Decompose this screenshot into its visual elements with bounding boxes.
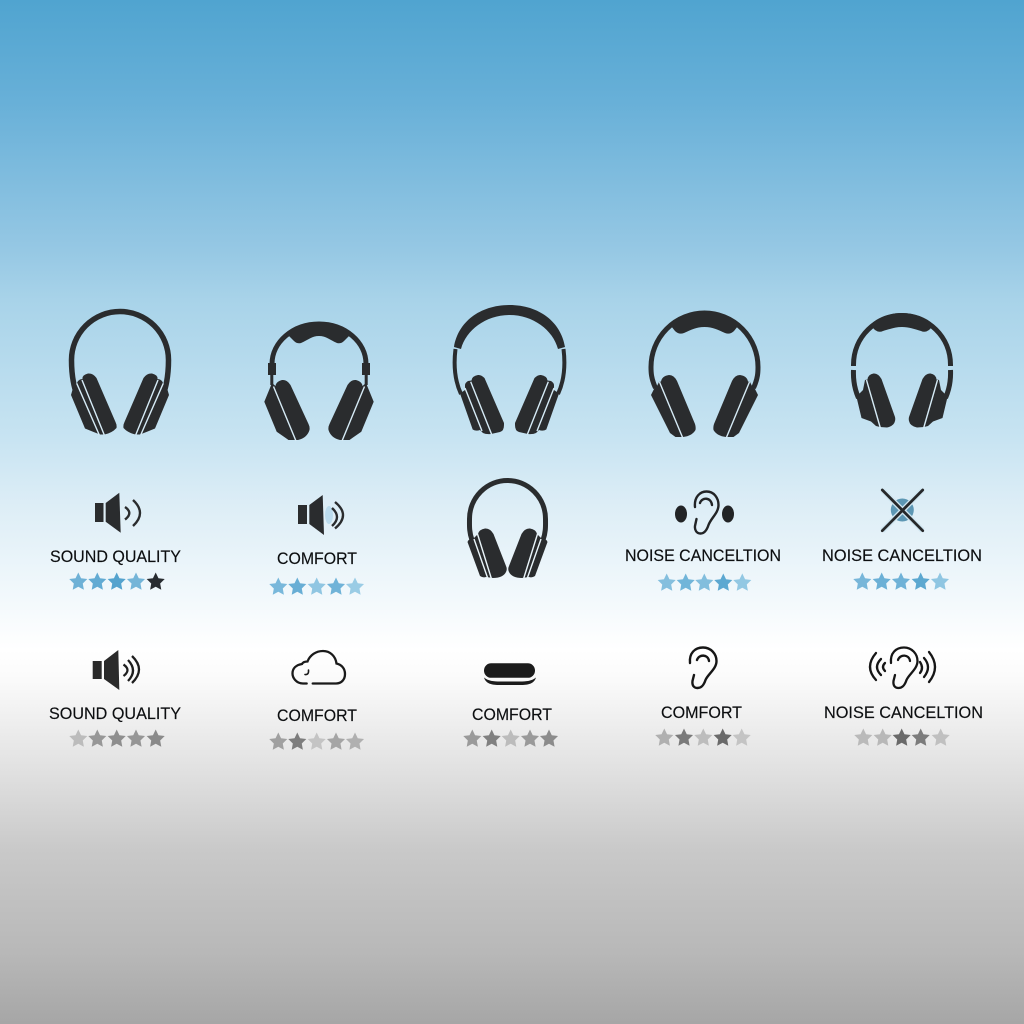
label: COMFORT bbox=[277, 550, 357, 568]
star rating bbox=[69, 730, 165, 747]
label: COMFORT bbox=[661, 704, 742, 722]
headphone 5 bbox=[853, 313, 951, 428]
icon: ear pad bbox=[484, 663, 536, 685]
row 3 column 4: comfort bbox=[655, 648, 751, 746]
star rating bbox=[463, 730, 558, 747]
label: NOISE CANCELTION bbox=[822, 547, 982, 565]
icon: speaker bbox=[298, 495, 343, 535]
icon: speaker bbox=[93, 650, 139, 690]
icon: speaker bbox=[95, 493, 140, 533]
icon: crossed circle bbox=[882, 490, 923, 531]
star rating bbox=[853, 572, 949, 590]
icon: ear bbox=[690, 648, 716, 688]
label: SOUND QUALITY bbox=[50, 548, 181, 566]
row 2 column 3: small headphone bbox=[468, 480, 548, 579]
row 2 column 4: noise cancellation bbox=[625, 492, 781, 591]
row 3 column 1: sound quality bbox=[49, 650, 181, 747]
label: NOISE CANCELTION bbox=[625, 547, 781, 565]
row 2 column 1: sound quality bbox=[50, 493, 181, 590]
star rating bbox=[269, 732, 364, 750]
star rating bbox=[658, 574, 751, 591]
row 2 column 2: comfort bbox=[269, 495, 364, 595]
icon: ear with blobs bbox=[675, 492, 734, 534]
star rating bbox=[655, 728, 751, 746]
row 2 column 5: noise cancellation bbox=[822, 490, 982, 590]
headphone 3 bbox=[454, 305, 565, 434]
label: NOISE CANCELTION bbox=[824, 704, 983, 722]
star rating bbox=[269, 578, 364, 595]
icon: ear with sound waves bbox=[870, 648, 935, 688]
star rating bbox=[69, 572, 165, 590]
row 3 column 5: noise cancellation bbox=[824, 648, 983, 746]
label: COMFORT bbox=[277, 707, 357, 725]
headphone 1 bbox=[71, 312, 169, 435]
headphone 4 bbox=[651, 311, 758, 438]
star rating bbox=[854, 728, 950, 746]
label: SOUND QUALITY bbox=[49, 705, 181, 723]
icon: cloud bbox=[292, 651, 345, 684]
headphone 2 bbox=[264, 322, 374, 441]
label: COMFORT bbox=[472, 706, 552, 724]
row 3 column 3: comfort bbox=[463, 663, 558, 747]
row 3 column 2: comfort bbox=[269, 651, 364, 750]
